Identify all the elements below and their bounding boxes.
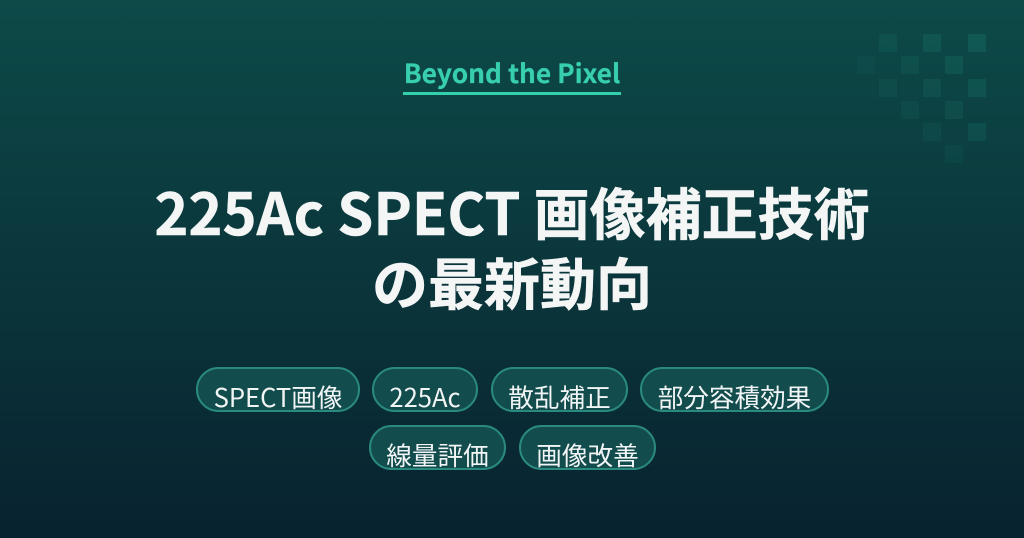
tag: 線量評価 <box>369 425 506 470</box>
decorative pixel pattern <box>879 34 986 141</box>
tag: SPECT画像: SPECT画像 <box>214 378 342 415</box>
title <box>154 168 870 322</box>
tag: 線量評価: 線量評価 <box>386 436 489 473</box>
tag: 225Ac <box>372 367 478 412</box>
tag: 散乱補正 <box>491 367 628 412</box>
tag: 部分容積効果 <box>640 367 829 412</box>
tags <box>196 367 829 473</box>
tag: 散乱補正: 散乱補正 <box>508 378 611 415</box>
title: の最新動向 <box>372 241 652 322</box>
title: 225Ac SPECT 画像補正技術 <box>154 168 870 252</box>
tag: 部分容積効果: 部分容積効果 <box>658 378 811 415</box>
brand heading: Beyond the Pixel: Beyond the Pixel <box>404 52 620 91</box>
tag: SPECT画像 <box>196 367 360 412</box>
tag: 画像改善 <box>519 425 656 470</box>
tag: 画像改善: 画像改善 <box>536 436 639 473</box>
tag: 225Ac: 225Ac <box>389 378 461 415</box>
